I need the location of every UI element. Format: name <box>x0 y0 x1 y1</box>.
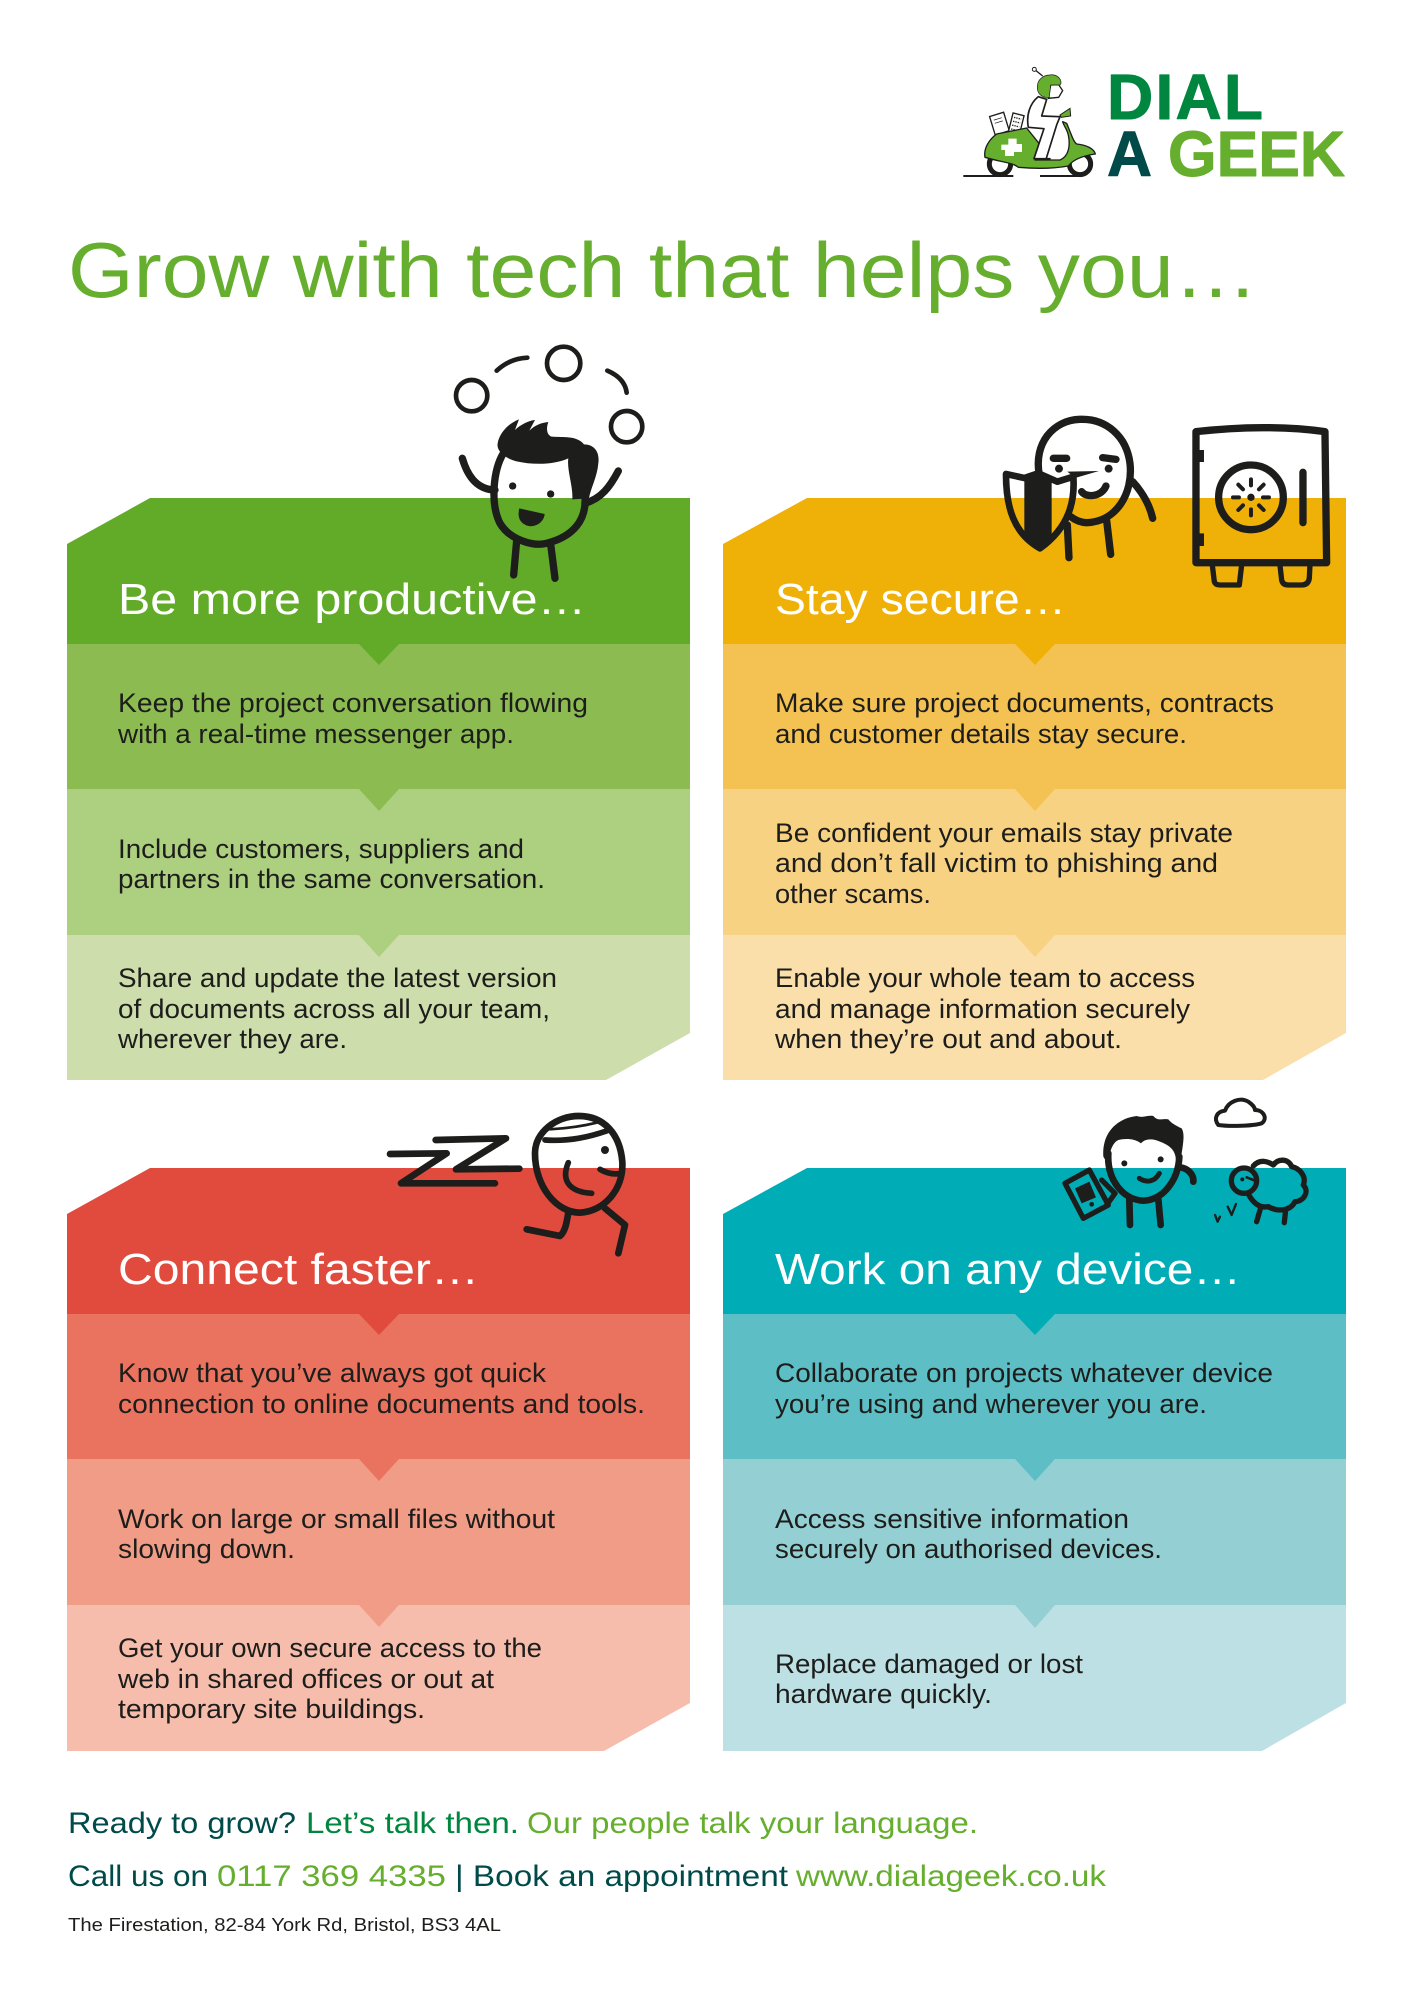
text: shared offices: web in shared offices or out at <box>117 1664 495 1694</box>
panel: work on any device <box>723 1168 1346 1751</box>
logo: Dial a Geek <box>963 61 1345 190</box>
icon: man with tablet <box>1065 1116 1193 1225</box>
heading: Be more productive… <box>118 575 586 624</box>
footer: contact details: Call us on <box>68 1860 208 1893</box>
text: messenger: with a real-time messenger app. <box>117 719 514 749</box>
icon: man with shield <box>1006 419 1153 558</box>
icon: sheep <box>1215 1160 1306 1223</box>
icon: juggler <box>456 347 642 578</box>
footer: call to action: Let’s talk then. <box>306 1807 519 1840</box>
footer: call to action: Ready to grow? <box>68 1807 296 1840</box>
heading: Connect faster… <box>118 1245 479 1294</box>
footer: contact details: 0117 369 4335 <box>217 1860 446 1893</box>
text: emails private: and don’t fall victim to phishing and <box>775 848 1218 878</box>
text: team access <box>774 963 1195 1054</box>
heading: Work on any device… <box>775 1245 1241 1294</box>
text: authorised devices: securely on authorised devices. <box>775 1534 1162 1564</box>
text: customers: partners in the same conversation. <box>118 864 545 894</box>
text: replace hardware: hardware quickly. <box>775 1679 992 1709</box>
text: authorised devices: Access sensitive information <box>775 1504 1129 1534</box>
icon: safe <box>1196 428 1327 585</box>
footer: contact details: www.dialageek.co.uk <box>795 1860 1106 1893</box>
text: quick connection: connection to online documents and tools. <box>118 1389 645 1419</box>
text: shared offices <box>117 1633 542 1724</box>
text: team access: Enable your whole team to access <box>775 963 1195 993</box>
text: shared offices: Get your own secure access to the <box>118 1633 542 1663</box>
text: messenger: Keep the project conversation flowing <box>118 688 588 718</box>
footer: contact details: | Book an appointment <box>455 1860 788 1893</box>
logo word: DIAL: DIAL <box>1107 61 1263 133</box>
text: documents: of documents across all your team, <box>118 994 550 1024</box>
panel: connect faster <box>67 1168 690 1751</box>
text: large files <box>118 1504 556 1564</box>
text: emails private: Be confident your emails stay private <box>775 818 1233 848</box>
title: Grow with tech that helps you… <box>68 226 1258 314</box>
icon: cloud <box>1216 1100 1265 1126</box>
text: emails private: other scams. <box>775 879 931 909</box>
text: documents: Share and update the latest version <box>118 963 557 993</box>
text: team access: when they’re out and about. <box>774 1024 1122 1054</box>
logo word: A: A <box>1107 118 1152 190</box>
icon: sleepy runner <box>390 1116 625 1253</box>
footer: call to action: Our people talk your language. <box>527 1807 978 1840</box>
text: documents: wherever they are. <box>117 1024 347 1054</box>
text: customers <box>118 834 545 894</box>
text: replace hardware: Replace damaged or lost <box>775 1649 1084 1679</box>
panel: stay secure <box>723 498 1346 1080</box>
footer: call to action <box>68 1807 978 1840</box>
text: whatever device: Collaborate on projects whatever device <box>775 1358 1273 1388</box>
logo word: GEEK: GEEK <box>1168 118 1345 190</box>
text: whatever device <box>775 1358 1273 1419</box>
footer: address: The Firestation, 82-84 York Rd, Bristol, BS3 4AL <box>68 1915 501 1935</box>
text: whatever device: you’re using and wherever you are. <box>775 1389 1207 1419</box>
text: authorised devices <box>775 1504 1162 1564</box>
text: documents <box>117 963 557 1054</box>
text: documents secure: Make sure project documents, contracts <box>775 688 1274 718</box>
text: messenger <box>117 688 588 749</box>
text: customers: Include customers, suppliers and <box>118 834 524 864</box>
text: large files: slowing down. <box>118 1534 295 1564</box>
panel: be more productive <box>67 498 690 1080</box>
text: quick connection: Know that you’ve always got quick <box>118 1358 547 1388</box>
text: quick connection <box>118 1358 645 1419</box>
text: team access: and manage information securely <box>775 994 1191 1024</box>
heading: Stay secure… <box>775 575 1066 624</box>
text: replace hardware <box>775 1649 1084 1709</box>
text: documents secure: and customer details stay secure. <box>775 719 1187 749</box>
text: large files: Work on large or small files without <box>118 1504 556 1534</box>
text: emails private <box>775 818 1233 909</box>
text: shared offices: temporary site buildings. <box>118 1694 425 1724</box>
text: documents secure <box>775 688 1274 749</box>
footer: contact details <box>68 1860 1106 1893</box>
icon: scooter rider <box>963 67 1095 176</box>
